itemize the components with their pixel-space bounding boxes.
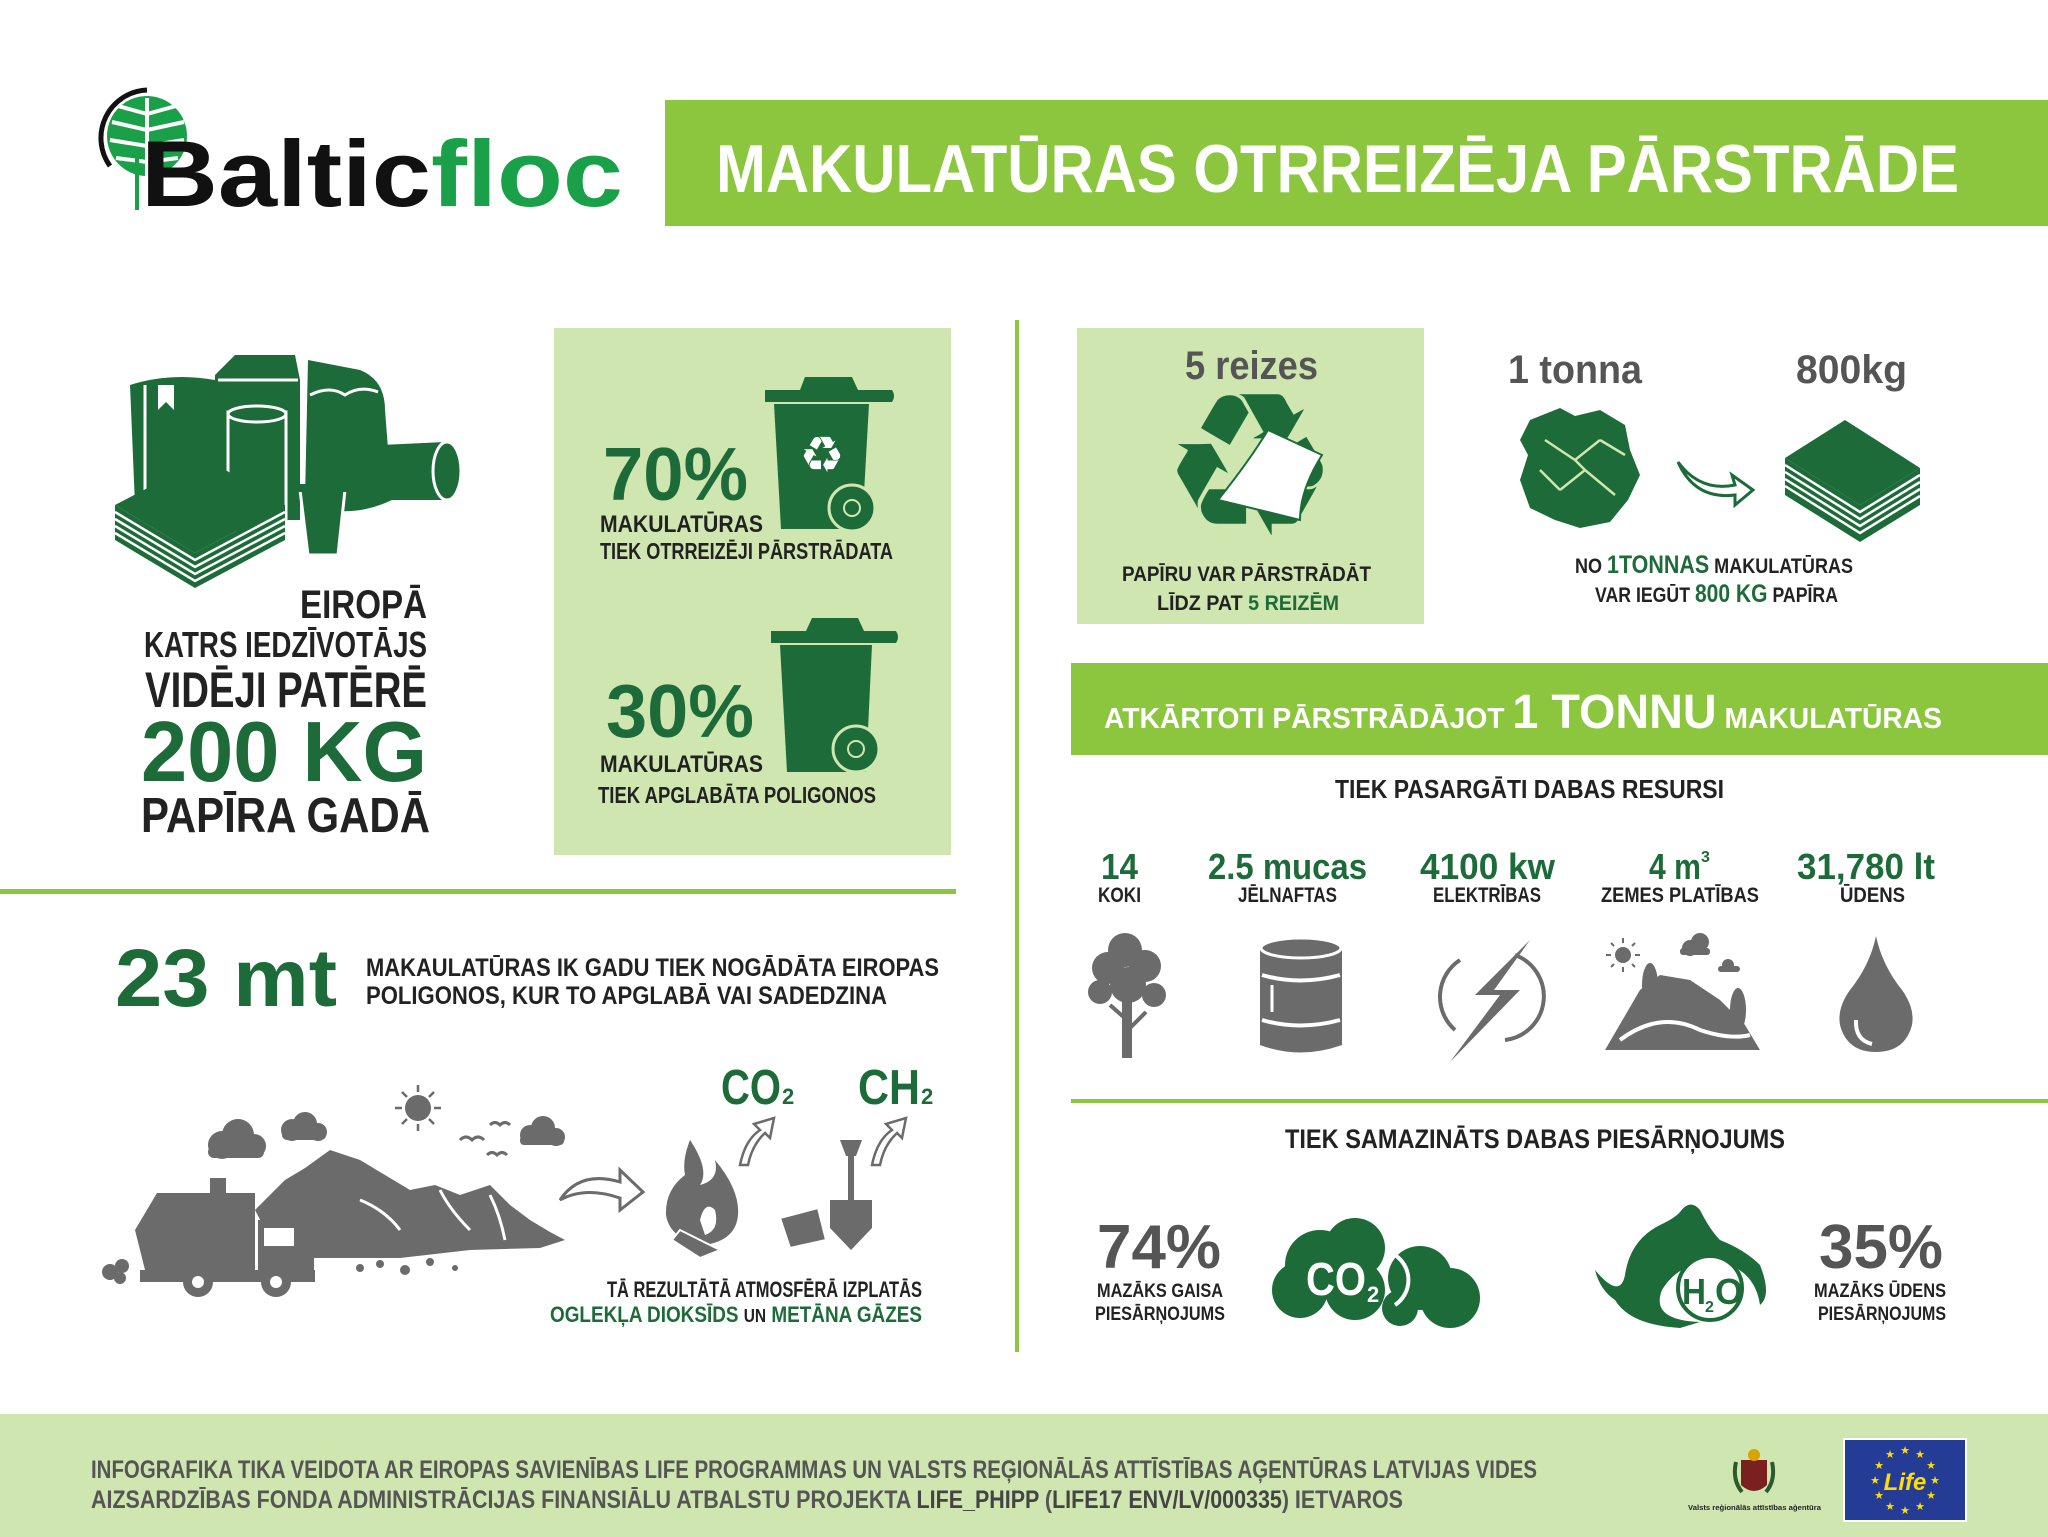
- stat: electricity: [1420, 846, 1556, 907]
- stat: 30% landfilled: MAKULATŪRAS: [600, 751, 763, 778]
- stat: 35% less water pollution: [1814, 1213, 1946, 1325]
- logo: Balticfloc: [101, 90, 623, 226]
- icon: water drop: [1839, 936, 1913, 1052]
- right divider: [1071, 1099, 2048, 1103]
- logo: EU LIFE flag: Life: [1884, 1469, 1926, 1496]
- logo: EU LIFE flag: ★: [1870, 1475, 1880, 1487]
- illustration: landfill with truck: [102, 1085, 565, 1297]
- panel: 1 ton to 800 kg: 1 tonna: [1508, 348, 1643, 392]
- left horizontal divider: [0, 889, 956, 894]
- panel: 5 times recycling: PAPĪRU VAR PĀRSTRĀDĀT: [1122, 563, 1371, 586]
- text block: 23 mt: MAKAULATŪRAS IK GADU TIEK NOGĀDĀTA EIROPAS: [366, 954, 939, 982]
- icon: landscape: [1605, 933, 1760, 1050]
- logo: EU LIFE flag: ★: [1885, 1501, 1895, 1513]
- text block: 23 mt: 23 mt: [115, 933, 337, 1024]
- panel: 1 ton to 800 kg: [1508, 348, 1920, 608]
- banner: recycling 1 ton: [1071, 663, 2048, 755]
- stat: 30% landfilled: 30%: [606, 669, 754, 753]
- logo: Latvian regional agency emblem: Valsts reģionālās attīstības aģentūra: [1688, 1504, 1821, 1512]
- clouds: [208, 1112, 565, 1159]
- stat: trees: 14: [1101, 846, 1138, 887]
- stat: 30% landfilled: [598, 669, 876, 808]
- stat: 70% recycled: MAKULATŪRAS: [600, 511, 763, 538]
- stat: water: [1797, 846, 1935, 907]
- stat: oil: JĒLNAFTAS: [1238, 884, 1337, 907]
- heading: pollution reduced: TIEK SAMAZINĀTS DABAS PIESĀRŅOJUMS: [1285, 1124, 1785, 1154]
- stat: 74% less air pollution: PIESĀRŅOJUMS: [1095, 1304, 1225, 1325]
- arrow: [1678, 462, 1753, 505]
- text block: Europe consumption: 200 KG: [141, 705, 427, 800]
- text block: Europe consumption: EIROPĀ: [300, 583, 427, 627]
- stat: land: ZEMES PLATĪBAS: [1601, 884, 1759, 907]
- logo: EU LIFE flag: ★: [1915, 1501, 1925, 1513]
- logo: EU LIFE flag: [1844, 1439, 1966, 1521]
- icon: H2O wave: 2: [1705, 1299, 1714, 1316]
- stat: 35% less water pollution: MAZĀKS ŪDENS: [1814, 1281, 1946, 1302]
- icon: burning paper: [666, 1140, 738, 1258]
- icon: CO2 cloud: CO: [1306, 1253, 1366, 1305]
- stat: 70% recycled: TIEK OTRREIZĒJI PĀRSTRĀDATA: [600, 538, 893, 564]
- panel: 1 ton to 800 kg: VAR IEGŪT 800 KG PAPĪRA: [1595, 580, 1838, 608]
- icon: H2O wave: [1595, 1204, 1766, 1328]
- stat: land: [1601, 846, 1759, 907]
- stats: resources: [1098, 846, 1935, 907]
- arrow: landfill to emissions: [560, 1170, 643, 1210]
- stat: oil: 2.5 mucas: [1208, 846, 1367, 887]
- icon: crumpled paper: [1520, 408, 1640, 528]
- stat: 30% landfilled: TIEK APGLABĀTA POLIGONOS: [598, 782, 876, 808]
- text block: Europe consumption: PAPĪRA GADĀ: [141, 789, 430, 843]
- logo: EU LIFE flag: ★: [1885, 1449, 1895, 1461]
- text: emissions result: OGLEKĻA DIOKSĪDS UN METĀNA GĀZES: [550, 1302, 922, 1327]
- title bar: [665, 100, 2048, 226]
- panel: 1 ton to 800 kg: 800kg: [1796, 348, 1907, 392]
- stat: 70% recycled: [600, 432, 893, 564]
- stat: oil: [1208, 846, 1367, 907]
- footer: [0, 1414, 2048, 1537]
- label: CO2 CH2: 2: [782, 1084, 794, 1109]
- stat: land: 3: [1701, 849, 1710, 866]
- icons: resources: [1088, 933, 1913, 1062]
- text block: 23 mt: POLIGONOS, KUR TO APGLABĀ VAI SADEDZINA: [366, 982, 887, 1010]
- stat: water: 31,780 lt: [1797, 846, 1935, 887]
- vertical divider: [1015, 320, 1019, 1352]
- label: CO2 CH2: [721, 1061, 933, 1115]
- sun: [395, 1085, 441, 1131]
- mound: [255, 1150, 565, 1258]
- logo: EU LIFE flag: ★: [1930, 1475, 1940, 1487]
- banner: recycling 1 ton: ATKĀRTOTI PĀRSTRĀDĀJOT 1 TONNU MAKULATŪRAS: [1104, 686, 1942, 739]
- text block: Europe consumption: VIDĒJI PATĒRĒ: [145, 662, 427, 718]
- logo: Balticfloc: Baltic: [141, 121, 431, 226]
- stat: land: 4 m: [1649, 846, 1701, 887]
- logo: EU LIFE flag: ★: [1900, 1505, 1910, 1517]
- icon: paper stack: [1785, 420, 1920, 542]
- panel: 1 ton to 800 kg: NO 1TONNAS MAKULATŪRAS: [1575, 551, 1853, 579]
- arrows up: [740, 1118, 906, 1165]
- stat: 74% less air pollution: 74%: [1097, 1213, 1221, 1282]
- heading: resources saved: TIEK PASARGĀTI DABAS RESURSI: [1335, 774, 1724, 804]
- panel: 5 times recycling: LĪDZ PAT 5 REIZĒM: [1157, 592, 1339, 615]
- label: CO2 CH2: CH: [858, 1061, 920, 1115]
- logo: EU LIFE flag: ★: [1874, 1460, 1884, 1472]
- icon: H2O wave: O: [1715, 1271, 1743, 1312]
- stat: water: ŪDENS: [1840, 884, 1905, 907]
- icon: shovel with paper: [780, 1140, 872, 1250]
- icon: CO2 cloud: 2: [1367, 1282, 1379, 1307]
- stat: trees: KOKI: [1098, 884, 1141, 907]
- logo: EU LIFE flag: ★: [1874, 1490, 1884, 1502]
- panel: 5 times recycling: [1077, 328, 1424, 624]
- text block: Europe consumption: KATRS IEDZĪVOTĀJS: [144, 624, 427, 665]
- label: CO2 CH2: CO: [721, 1061, 781, 1115]
- label: CO2 CH2: 2: [921, 1084, 933, 1109]
- stat: trees: [1098, 846, 1141, 907]
- stat: 70% recycled: 70%: [603, 432, 748, 516]
- panel: 5 times recycling: 5 reizes: [1185, 344, 1318, 388]
- logo: EU LIFE flag: ★: [1926, 1460, 1936, 1472]
- stat: electricity: ELEKTRĪBAS: [1433, 884, 1541, 907]
- truck: [135, 1193, 255, 1270]
- text: emissions result: [550, 1277, 922, 1327]
- icon: waste bin: [771, 618, 898, 772]
- logo: EU LIFE flag: ★: [1900, 1445, 1910, 1457]
- stat: electricity: 4100 kw: [1420, 846, 1556, 887]
- text: emissions result: TĀ REZULTĀTĀ ATMOSFĒRĀ IZPLATĀS: [607, 1277, 922, 1302]
- logo: Balticfloc: floc: [431, 121, 623, 226]
- logo: Latvian regional agency emblem: [1688, 1449, 1821, 1512]
- icon: H2O wave: H: [1682, 1271, 1706, 1312]
- text block: Europe consumption: [141, 583, 430, 843]
- icon: recycling bin: [765, 377, 894, 531]
- icon: CO2 cloud: [1272, 1218, 1480, 1328]
- stat: 35% less water pollution: PIESĀRŅOJUMS: [1818, 1304, 1946, 1325]
- stat: 74% less air pollution: MAZĀKS GAISA: [1097, 1281, 1223, 1302]
- icon: paper products pile: [115, 355, 461, 588]
- stat: 35% less water pollution: 35%: [1819, 1213, 1943, 1282]
- text block: 23 mt: [115, 933, 939, 1024]
- icon: recycling bin: ♻: [800, 427, 844, 483]
- footer text: AIZSARDZĪBAS FONDA ADMINISTRĀCIJAS FINANSIĀLU ATBALSTU PROJEKTA LIFE_PHIPP (LIFE17 ENV/LV/000335) IETVAROS: [91, 1486, 1403, 1514]
- panel: recycled vs landfilled: [554, 328, 951, 855]
- stat: 74% less air pollution: [1095, 1213, 1225, 1325]
- icon: tree: [1088, 933, 1166, 1058]
- footer text: [91, 1456, 1537, 1514]
- footer text: INFOGRAFIKA TIKA VEIDOTA AR EIROPAS SAVIENĪBAS LIFE PROGRAMMAS UN VALSTS REĢIONĀLĀS ATTĪSTĪBAS AĢENTŪRAS LATVIJAS VIDES: [91, 1456, 1537, 1484]
- logo: EU LIFE flag: ★: [1915, 1449, 1925, 1461]
- icon: recycle with paper: ♻: [1160, 355, 1340, 578]
- birds: [460, 1122, 510, 1155]
- icon: lightning: [1440, 940, 1544, 1062]
- icon: barrel: [1260, 938, 1342, 1052]
- icon: leaf: [101, 90, 187, 210]
- logo: EU LIFE flag: ★: [1926, 1490, 1936, 1502]
